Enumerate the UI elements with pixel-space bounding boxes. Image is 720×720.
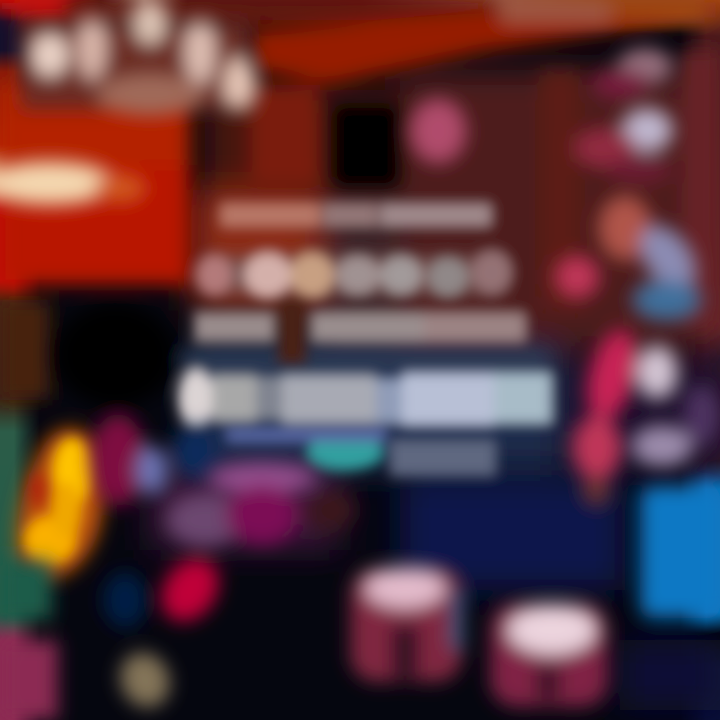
panel: character at lower left <box>0 414 217 720</box>
icon: yellow number badge <box>17 428 105 579</box>
panel: red ceiling band <box>2 0 720 185</box>
text line three <box>194 312 526 342</box>
panel: coloured cards under the title <box>111 464 356 716</box>
text line five, teal <box>226 428 496 476</box>
icon: right candy drum <box>490 603 608 707</box>
icon: chandelier <box>20 0 256 115</box>
panel: striped wall at right <box>540 50 720 330</box>
panel: hanging decoration column <box>555 48 720 506</box>
panel: dark doorway <box>332 104 400 188</box>
background: soft wall and floor glow <box>150 70 720 710</box>
panel: dark figure at left <box>55 303 175 407</box>
icon: left candy drum <box>350 568 464 682</box>
icon: pink lantern <box>410 99 466 163</box>
text line two <box>196 250 512 298</box>
panel: red wall at left <box>0 85 190 400</box>
text line four, large <box>178 368 552 428</box>
underlay behind title lines <box>180 258 550 370</box>
text line one <box>220 203 492 227</box>
panel: blue screen <box>640 486 720 618</box>
gap in title lines <box>278 298 306 364</box>
icon: glowing wall light <box>0 162 146 204</box>
heading: blurred title lines <box>178 203 552 476</box>
